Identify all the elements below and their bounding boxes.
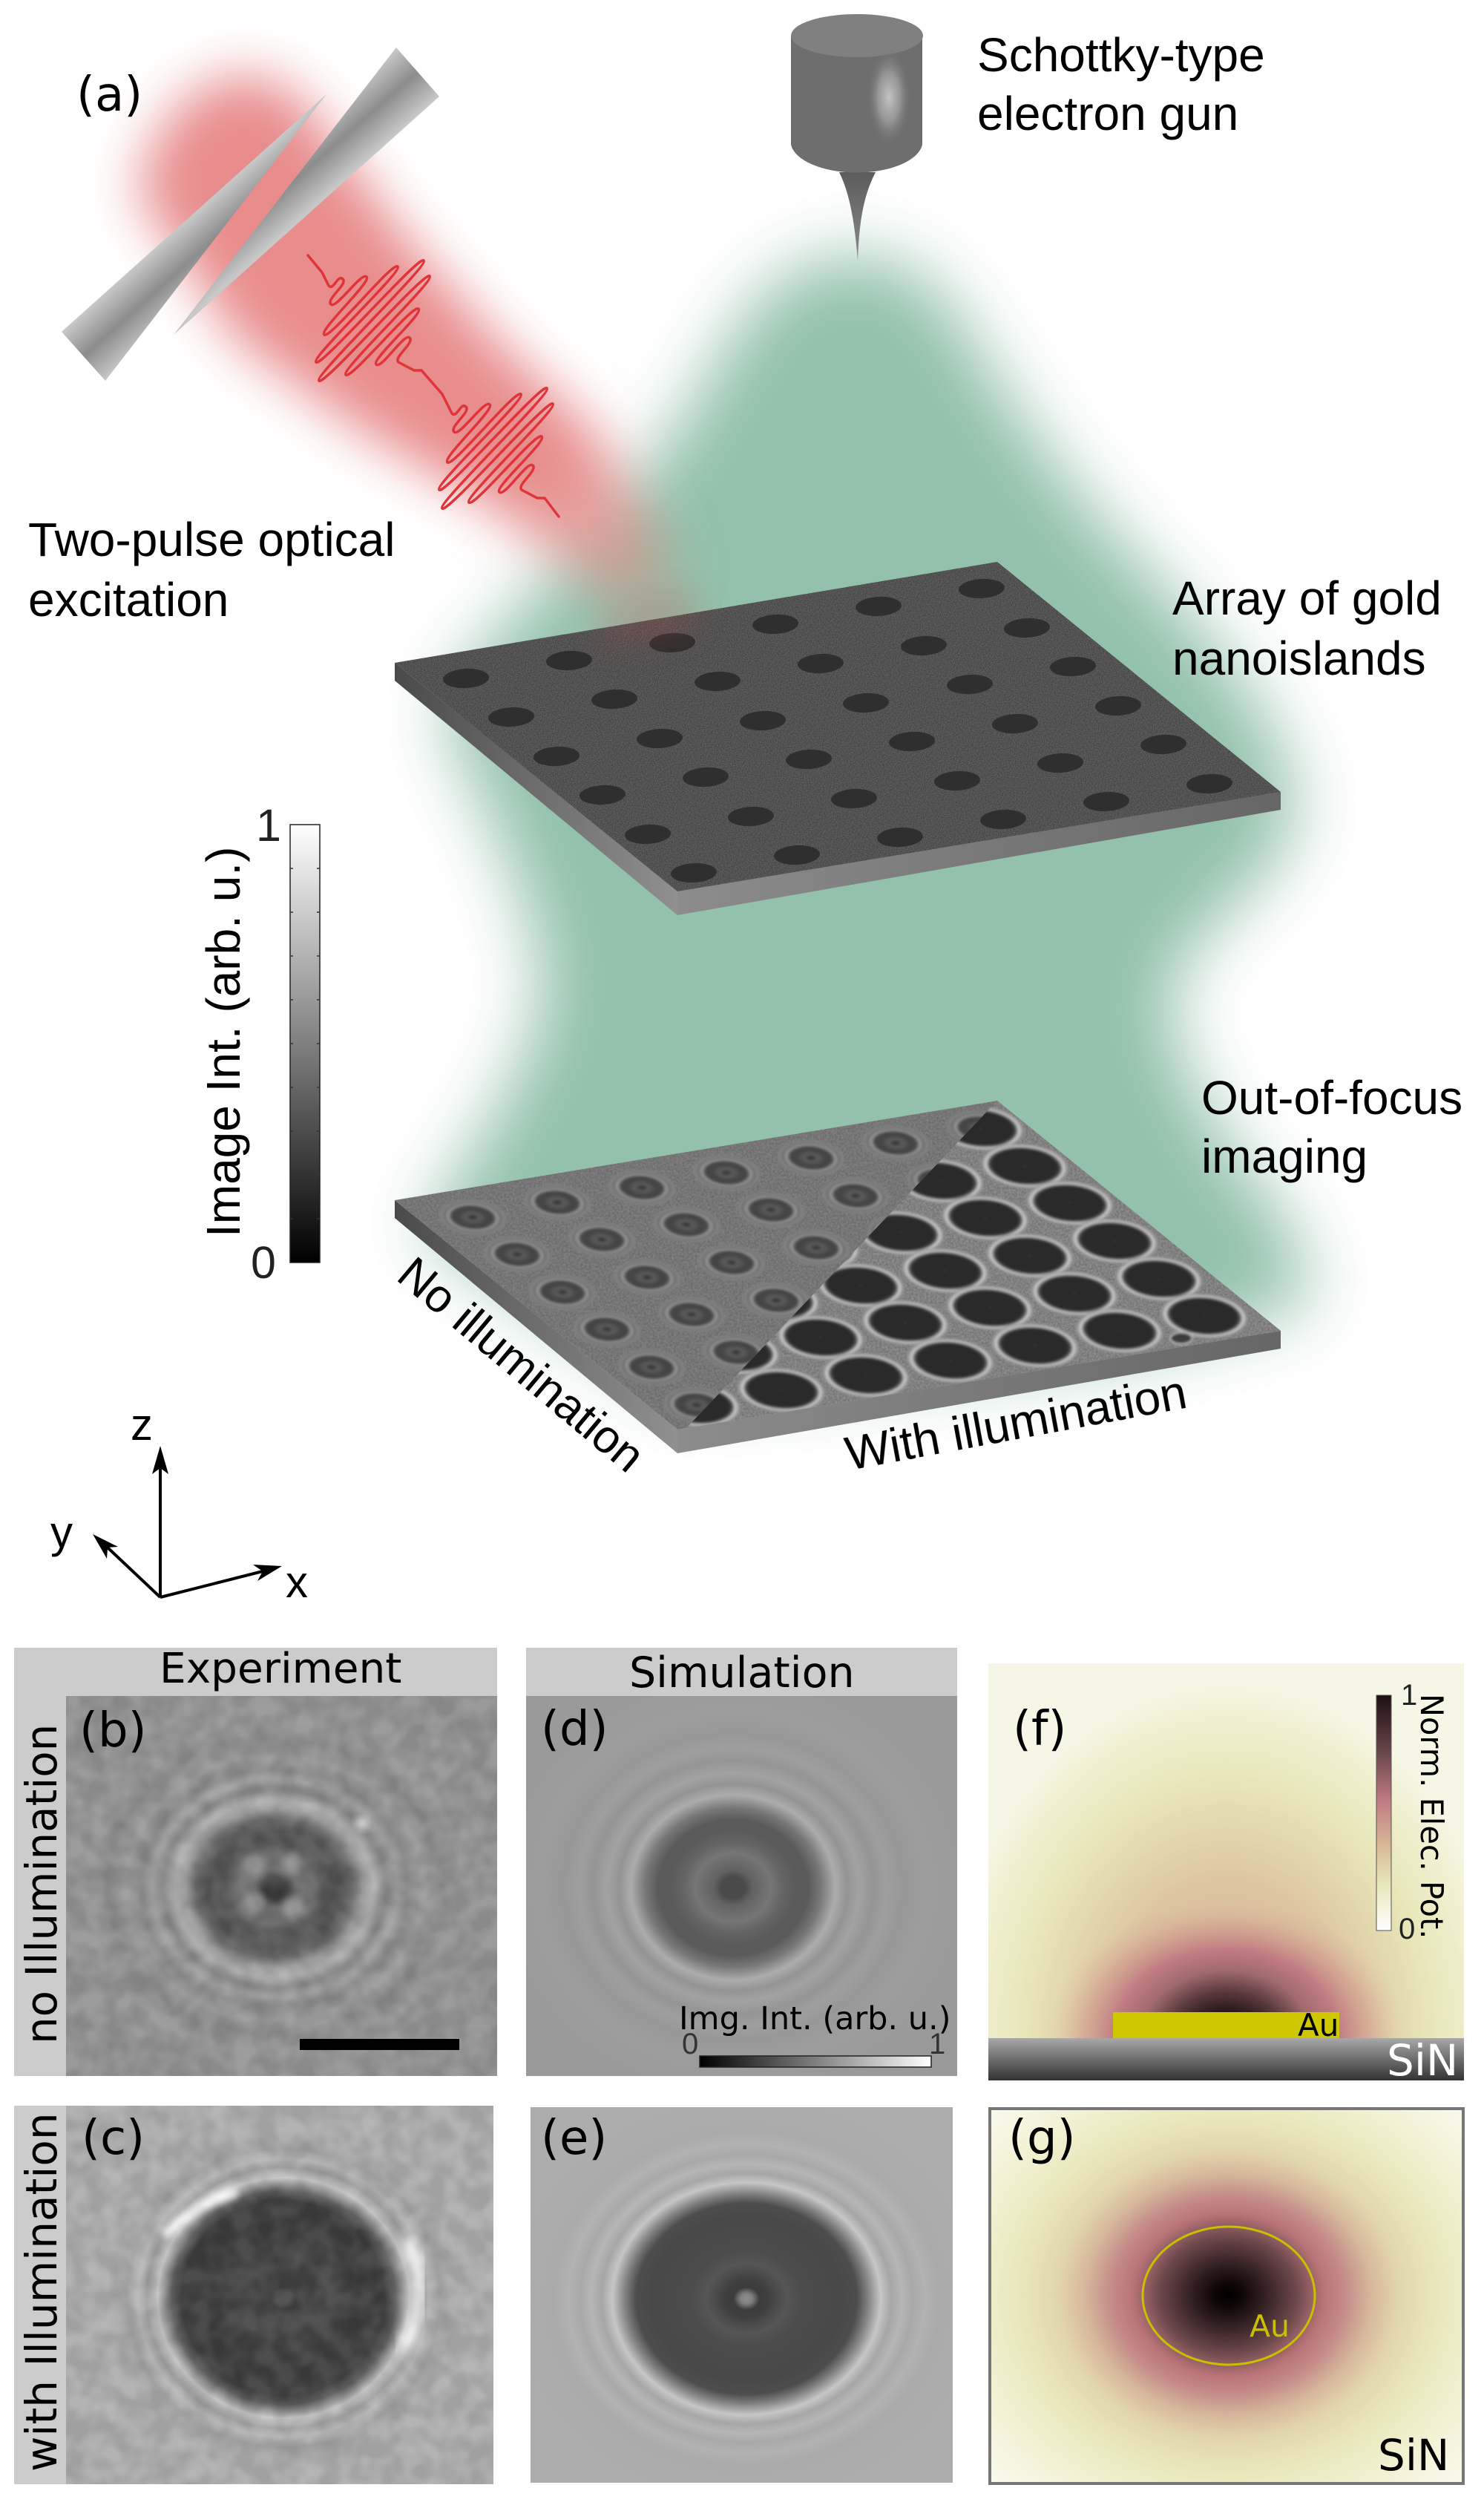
label: With illumination: With illumination bbox=[841, 1365, 1191, 1481]
header: Simulation bbox=[526, 1648, 957, 1697]
label (g): (g) bbox=[1008, 2111, 1076, 2166]
substrate SiN: SiN bbox=[1387, 2035, 1458, 2086]
colorbar: potential: 0 bbox=[1399, 1913, 1415, 1945]
label (e): (e) bbox=[541, 2111, 607, 2166]
row label: no Illumination: no Illumination bbox=[16, 1724, 67, 2044]
colorbar: potential: 1 bbox=[1401, 1679, 1417, 1712]
electron beam bbox=[423, 256, 1308, 1395]
with-illumination islands bbox=[649, 1101, 1281, 1432]
label Au: Au bbox=[1298, 2007, 1339, 2043]
label (c): (c) bbox=[82, 2111, 145, 2166]
sample: out-of-focus image plate bbox=[395, 1101, 1281, 1453]
colorbar: Img. Int.: 1 bbox=[929, 2028, 945, 2060]
label (d): (d) bbox=[541, 1702, 608, 1757]
icon: beam-splitting wedges bbox=[62, 48, 439, 381]
icon: two-pulse waveform bbox=[308, 255, 559, 517]
label (f): (f) bbox=[1013, 1702, 1066, 1757]
gold island bbox=[1113, 2012, 1339, 2038]
axis label z: z bbox=[131, 1400, 153, 1450]
panel f: potential cross-section bbox=[988, 1663, 1464, 2080]
label: Schottky-type electron gun: electron gun bbox=[977, 87, 1238, 140]
laser spot on sample bbox=[601, 592, 701, 646]
colorbar: Img. Int.: Img. Int. (arb. u.) bbox=[679, 2000, 951, 2037]
substrate SiN bbox=[988, 2035, 1464, 2086]
colorbar tick 1: 1 bbox=[256, 800, 281, 851]
sample: array of gold nanoislands bbox=[395, 562, 1281, 915]
label: Out-of-focus imaging: Out-of-focus bbox=[1201, 1071, 1462, 1124]
axis label x: x bbox=[286, 1557, 308, 1607]
panel e: simulation with illumination bbox=[531, 2107, 953, 2483]
label: No illumination: No illumination bbox=[388, 1247, 654, 1482]
colorbar: Img. Int.: 0 bbox=[682, 2028, 698, 2060]
label Au: Au bbox=[1250, 2308, 1290, 2344]
label (b): (b) bbox=[79, 1703, 147, 1758]
panel c: experiment with illumination bbox=[66, 2106, 493, 2484]
panel d: simulation no illumination bbox=[526, 1696, 957, 2076]
gold island outline bbox=[1143, 2227, 1315, 2365]
axis label y: y bbox=[50, 1507, 73, 1557]
header: Simulation: Simulation bbox=[629, 1648, 855, 1697]
label: Out-of-focus imaging: imaging bbox=[1201, 1130, 1368, 1183]
label SiN: SiN bbox=[1378, 2430, 1449, 2481]
label: Array of gold nanoislands: nanoislands bbox=[1172, 632, 1426, 685]
icon: electron gun bbox=[791, 14, 923, 261]
header: Experiment bbox=[14, 1645, 497, 1696]
label: Two-pulse optical excitation: excitation bbox=[28, 573, 229, 626]
colorbar tick 0: 0 bbox=[251, 1237, 276, 1288]
axes: xyz bbox=[50, 1400, 308, 1607]
label: (a): (a) bbox=[76, 68, 142, 122]
colorbar: potential: Norm. Elec. Pot. bbox=[1414, 1694, 1450, 1939]
colorbar: image intensity bbox=[197, 800, 320, 1288]
label: Array of gold nanoislands: Array of gold bbox=[1172, 572, 1442, 625]
laser beam bbox=[137, 74, 668, 616]
panel g: potential top view bbox=[988, 2107, 1465, 2485]
no-illumination islands bbox=[436, 1107, 1017, 1427]
scale bar bbox=[300, 2039, 459, 2050]
header: Experiment: Experiment bbox=[160, 1645, 401, 1693]
row label: with Illumination: with Illumination bbox=[16, 2112, 67, 2472]
panel b: experiment no illumination bbox=[66, 1696, 497, 2076]
label: Schottky-type electron gun: Schottky-type bbox=[977, 28, 1265, 82]
colorbar title: Image Int. (arb. u.) bbox=[197, 847, 250, 1237]
colorbar: Img. Int. bbox=[679, 2000, 951, 2067]
label: Two-pulse optical excitation: Two-pulse optical bbox=[28, 513, 395, 566]
colorbar: potential bbox=[1376, 1679, 1450, 1945]
